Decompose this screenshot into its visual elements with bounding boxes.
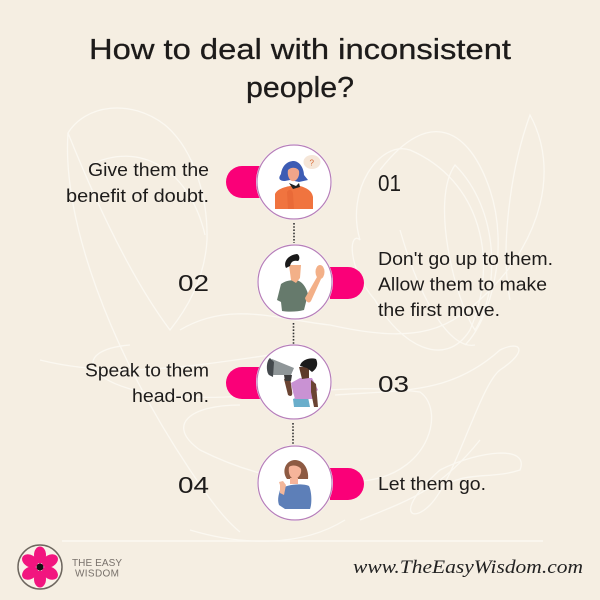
logo wordmark: THE EASY [72, 558, 122, 569]
step 3 number: 03 [378, 371, 409, 397]
title: people? [246, 72, 354, 104]
step 4 text: Let them go. [378, 474, 486, 494]
title: How to deal with inconsistent [89, 34, 511, 66]
connector: dotted line 2 to 3 [292, 323, 294, 344]
step 2 text: Don't go up to them. [378, 249, 553, 269]
connector: dotted line 3 to 4 [292, 423, 294, 445]
title [89, 34, 511, 104]
step 1 [66, 144, 401, 220]
step 4 illustration: woman waving [257, 445, 333, 521]
step 2 text: Allow them to make [378, 274, 547, 294]
step 1 illustration: woman thinking [256, 144, 332, 220]
step 2 number: 02 [178, 270, 209, 296]
step 1 text: Give them the [88, 160, 209, 180]
logo emblem [18, 545, 62, 589]
step 2 [178, 244, 553, 320]
step 3 illustration: woman with megaphone [256, 344, 332, 420]
step 3 text: Speak to them [85, 360, 209, 380]
step 2 illustration: man waving [257, 244, 333, 320]
step 2 pink tab [330, 267, 364, 299]
step 1 text: benefit of doubt. [66, 186, 209, 206]
step 1 illustration: woman thinking: ? [310, 158, 314, 168]
step 3 text: head-on. [132, 386, 209, 406]
connector: dotted line 1 to 2 [293, 223, 295, 243]
footer logo [18, 545, 122, 589]
step 3 [85, 344, 409, 420]
step 4 pink tab [330, 468, 364, 500]
step 2 text: the first move. [378, 300, 500, 320]
website url: www.TheEasyWisdom.com [353, 557, 583, 578]
step 1 number: 01 [378, 170, 401, 196]
step 3 pink tab [226, 367, 260, 399]
footer divider line [62, 540, 543, 542]
step 4 [178, 445, 486, 521]
step 4 number: 04 [178, 472, 209, 498]
step 1 pink tab [226, 166, 260, 198]
logo wordmark: WISDOM [75, 568, 119, 580]
